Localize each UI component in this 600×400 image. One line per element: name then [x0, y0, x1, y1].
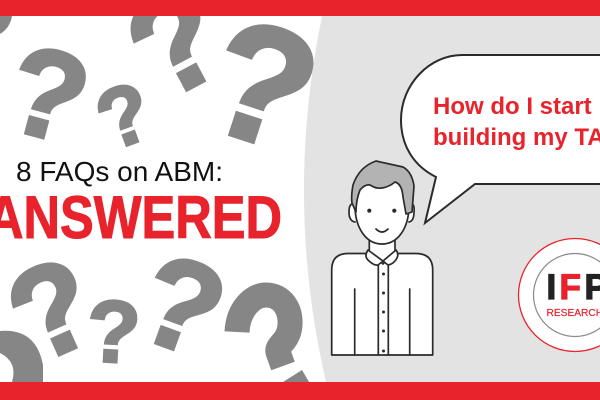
bubble shape — [401, 55, 600, 223]
eyes — [367, 209, 371, 213]
question marks: ? — [84, 281, 143, 382]
title: 8 FAQs on ABM: — [16, 156, 223, 187]
collar — [366, 250, 398, 265]
buttons — [382, 272, 385, 352]
right eye — [392, 209, 396, 213]
question marks — [0, 0, 339, 391]
question marks: ? — [121, 226, 243, 387]
icon: man in shirt — [332, 161, 433, 355]
speech bubble — [401, 55, 600, 223]
logo: IFP Research — [518, 238, 600, 352]
outer ring — [518, 238, 600, 352]
logo letters: I — [546, 268, 556, 307]
neck — [369, 240, 395, 264]
face — [355, 179, 409, 244]
hair — [352, 161, 414, 214]
sleeve lines — [355, 289, 410, 355]
grey background panel — [304, 16, 600, 382]
logo letters: F — [560, 268, 581, 307]
ears — [349, 204, 414, 222]
placket — [378, 265, 388, 355]
smile — [376, 229, 388, 232]
inner ring — [534, 254, 600, 336]
shirt — [332, 254, 433, 355]
question text: How do I start — [433, 93, 592, 120]
bottom red bar — [0, 382, 600, 400]
top red bar — [0, 0, 600, 16]
question marks: ? — [84, 63, 164, 169]
